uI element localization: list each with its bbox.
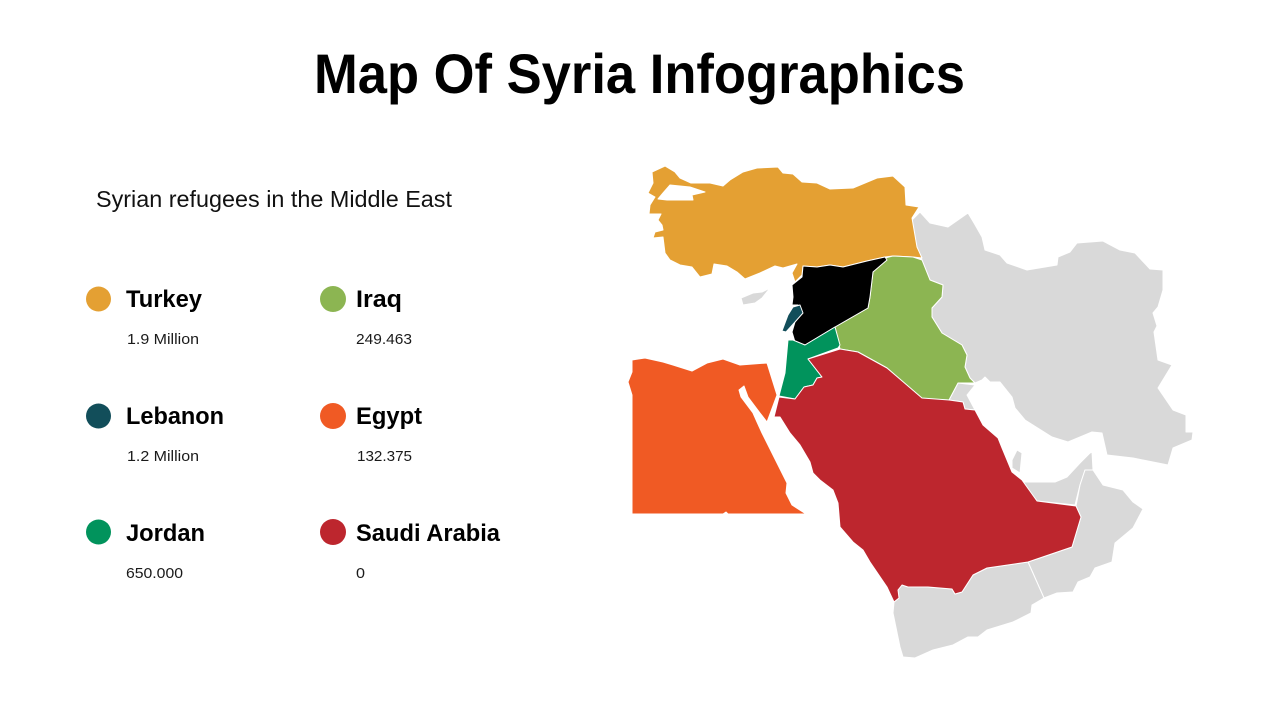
- map: Saudi Arabia: [774, 349, 1081, 602]
- map: Turkey: [648, 166, 922, 282]
- map: Egypt: [628, 358, 806, 514]
- legend item: Jordan: Jordan: [126, 520, 205, 547]
- legend item: Saudi Arabia: 0: [356, 565, 365, 582]
- map: UAE: [1022, 452, 1093, 505]
- legend item: Jordan: 650.000: [126, 565, 183, 582]
- legend item: Lebanon: [86, 403, 224, 465]
- legend item: Saudi Arabia: [320, 519, 501, 582]
- map: Cyprus: [741, 288, 770, 305]
- legend item: Iraq: 249.463: [356, 331, 412, 348]
- legend item: Lebanon: 1.2 Million: [127, 448, 199, 465]
- map: Iraq: [835, 256, 975, 400]
- map: Oman: [1028, 470, 1143, 598]
- map: Lebanon: [782, 305, 803, 332]
- map: Syria: [792, 257, 887, 345]
- legend item: Egypt: Egypt: [356, 403, 422, 430]
- subtitle: Syrian refugees in the Middle East: [96, 186, 453, 212]
- legend item: Turkey: Turkey: [126, 286, 203, 313]
- legend item: Iraq: Iraq: [356, 286, 402, 313]
- legend item: Turkey: 1.9 Million: [127, 331, 199, 348]
- map: Iran: [912, 212, 1193, 465]
- legend item: Lebanon: Lebanon: [126, 403, 224, 430]
- map: Jordan: [779, 327, 840, 399]
- map of the Middle East: [628, 166, 1193, 658]
- legend item: Iraq: [320, 286, 412, 348]
- legend: [86, 286, 501, 582]
- legend item: Saudi Arabia: Saudi Arabia: [356, 520, 501, 547]
- map: Qatar: [1012, 450, 1022, 473]
- map: Yemen: [893, 562, 1044, 658]
- legend item: Egypt: 132.375: [357, 448, 412, 465]
- map: Kuwait: [949, 383, 975, 410]
- legend item: Jordan: [86, 520, 205, 582]
- legend item: Turkey: [86, 286, 203, 348]
- title: Map Of Syria Infographics: [314, 42, 965, 105]
- legend item: Egypt: [320, 403, 422, 465]
